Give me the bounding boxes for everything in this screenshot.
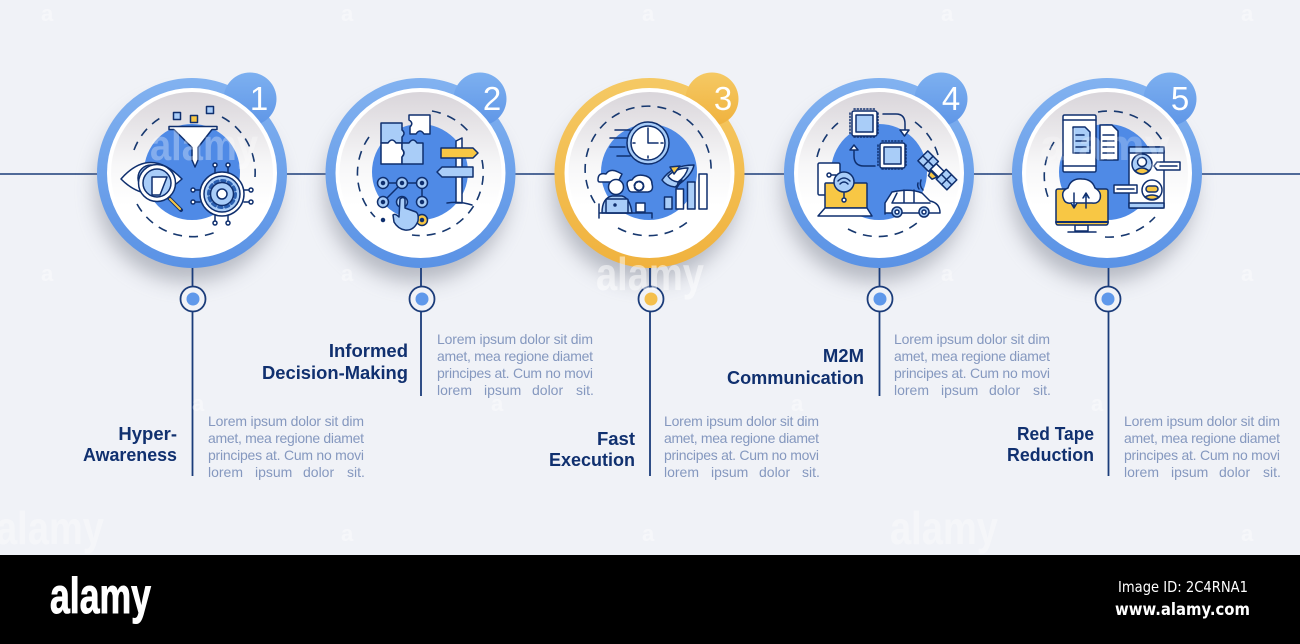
- heading 1: Awareness: [83, 444, 177, 465]
- body text 5: Lorem ipsum dolor sit dim: [1124, 413, 1280, 429]
- horizontal timeline: [0, 173, 1300, 175]
- inner disc 2: [336, 88, 506, 258]
- body text 4: principes at. Cum no movi: [894, 365, 1050, 381]
- body text 4: Lorem ipsum dolor sit dim: [894, 331, 1050, 347]
- footer bar: [0, 555, 1300, 644]
- drop shadow 4: [783, 98, 967, 282]
- watermarks: a: [1241, 261, 1254, 286]
- body text 3: Lorem ipsum dolor sit dim: [664, 413, 819, 429]
- body text 3: sit.: [802, 464, 820, 480]
- node 1: [180, 286, 206, 312]
- icon: tablet phone chatbot cloud monitor: [1056, 115, 1180, 232]
- heading 4: Communication: [727, 367, 864, 388]
- ring 1: [97, 78, 287, 268]
- body text 3: dolor: [759, 464, 790, 480]
- panel: step 2 Informed Decision-Making: [262, 72, 594, 398]
- body text 1: sit.: [347, 464, 365, 480]
- watermarks: a: [491, 391, 504, 416]
- dashed orbit 5: [1044, 111, 1162, 237]
- body text 1: dolor: [303, 464, 334, 480]
- ring 2: [326, 78, 516, 268]
- icon: analytics funnel eye gear: [121, 106, 253, 225]
- heading 5: Reduction: [1007, 444, 1094, 465]
- body text 3: lorem: [664, 464, 699, 480]
- body text 5: sit.: [1263, 464, 1281, 480]
- footer image id: Image ID: 2C4RNA1: [1118, 578, 1248, 596]
- body text 5: dolor: [1219, 464, 1250, 480]
- icon: puzzle signpost pattern lock: [378, 115, 478, 230]
- dashed orbit 4: [817, 122, 938, 237]
- connector line 3: [649, 262, 651, 476]
- body text 4: sit.: [1033, 382, 1051, 398]
- body text 1: ipsum: [255, 464, 292, 480]
- body text 2: amet, mea regione diamet: [437, 348, 593, 364]
- body text 2: principes at. Cum no movi: [437, 365, 593, 381]
- badge number 4: 4: [942, 80, 960, 117]
- body text 3: amet, mea regione diamet: [664, 430, 819, 446]
- watermarks: a: [341, 261, 354, 286]
- watermarks: a: [1091, 391, 1104, 416]
- ring 5: [1012, 78, 1202, 268]
- dashed orbit 2: [357, 111, 483, 236]
- node 4: [868, 286, 892, 312]
- badge 1: [224, 72, 276, 126]
- dashed orbit 1: [134, 117, 255, 237]
- badge number 5: 5: [1171, 80, 1189, 117]
- watermarks: a: [642, 521, 655, 546]
- connector line 5: [1108, 262, 1110, 476]
- watermarks: a: [341, 521, 354, 546]
- watermarks: alamy: [890, 502, 998, 554]
- body text 2: sit.: [576, 382, 594, 398]
- watermarks: alamy: [1040, 121, 1171, 170]
- heading 1: Hyper-: [118, 423, 177, 444]
- heading 2: Decision-Making: [262, 362, 408, 383]
- badge 3: [686, 72, 738, 126]
- heading 3: Fast: [597, 428, 635, 449]
- connector line 1: [192, 262, 194, 476]
- drop shadow 3: [554, 98, 738, 282]
- heading 4: M2M: [823, 345, 864, 366]
- body text 2: ipsum: [484, 382, 521, 398]
- body text 3: principes at. Cum no movi: [664, 447, 819, 463]
- panel: step 3 Fast Execution: [549, 72, 820, 480]
- watermarks: a: [341, 1, 354, 26]
- panel: step 5 Red Tape Reduction: [1007, 72, 1281, 480]
- body text 5: amet, mea regione diamet: [1124, 430, 1280, 446]
- body text 4: lorem: [894, 382, 929, 398]
- node 5: [1096, 286, 1120, 312]
- body text 2: dolor: [532, 382, 563, 398]
- body text 4: amet, mea regione diamet: [894, 348, 1050, 364]
- watermarks: a: [1241, 521, 1254, 546]
- ring 3: [554, 78, 744, 268]
- connector line 2: [420, 262, 422, 396]
- icon: clock worker rocket bars: [598, 122, 707, 218]
- drop shadow 2: [325, 98, 509, 282]
- body text 1: amet, mea regione diamet: [208, 430, 364, 446]
- badge 2: [454, 72, 506, 126]
- drop shadow 5: [1011, 98, 1195, 282]
- blue disc 2: [372, 124, 468, 220]
- blue disc 3: [601, 124, 697, 220]
- heading 3: Execution: [549, 449, 635, 470]
- watermarks: a: [1241, 1, 1254, 26]
- inner disc 5: [1022, 88, 1192, 258]
- inner disc 4: [794, 88, 964, 258]
- footer logo: alamy: [50, 568, 151, 624]
- watermarks: a: [41, 1, 54, 26]
- watermarks: a: [642, 1, 655, 26]
- body text 4: dolor: [989, 382, 1020, 398]
- body text 2: lorem: [437, 382, 472, 398]
- inner disc 1: [107, 88, 277, 258]
- badge 5: [1144, 72, 1196, 126]
- blue disc 5: [1059, 124, 1155, 220]
- blue disc 4: [831, 124, 927, 220]
- body text 4: ipsum: [941, 382, 978, 398]
- watermarks: a: [41, 261, 54, 286]
- body text 2: Lorem ipsum dolor sit dim: [437, 331, 593, 347]
- connector line 4: [878, 262, 880, 396]
- drop shadow 1: [96, 98, 280, 282]
- watermarks: a: [941, 261, 954, 286]
- icon: chips laptop satellite car: [818, 109, 957, 217]
- body text 1: Lorem ipsum dolor sit dim: [208, 413, 364, 429]
- dashed orbit 3: [585, 106, 711, 236]
- body text 1: principes at. Cum no movi: [208, 447, 364, 463]
- blue disc 1: [144, 124, 240, 220]
- watermarks: a: [941, 1, 954, 26]
- badge 4: [914, 72, 968, 126]
- body text 5: principes at. Cum no movi: [1124, 447, 1280, 463]
- heading 2: Informed: [329, 340, 408, 361]
- node 3: [638, 286, 664, 312]
- body text 3: ipsum: [711, 464, 748, 480]
- panel: step 1 Hyper-Awareness: [83, 72, 365, 480]
- inner disc 3: [564, 88, 734, 258]
- node 2: [410, 286, 434, 312]
- heading 5: Red Tape: [1017, 423, 1094, 444]
- watermarks: alamy: [596, 248, 704, 300]
- badge number 1: 1: [250, 80, 268, 117]
- badge number 3: 3: [714, 80, 732, 117]
- watermarks: alamy: [150, 121, 258, 170]
- ring 4: [784, 78, 974, 268]
- footer url: www.alamy.com: [1115, 600, 1250, 620]
- body text 1: lorem: [208, 464, 243, 480]
- body text 5: lorem: [1124, 464, 1159, 480]
- watermarks: a: [791, 391, 804, 416]
- panel: step 4 M2M Communication: [727, 72, 1051, 398]
- body text 5: ipsum: [1171, 464, 1208, 480]
- badge number 2: 2: [483, 80, 501, 117]
- watermarks: a: [192, 391, 205, 416]
